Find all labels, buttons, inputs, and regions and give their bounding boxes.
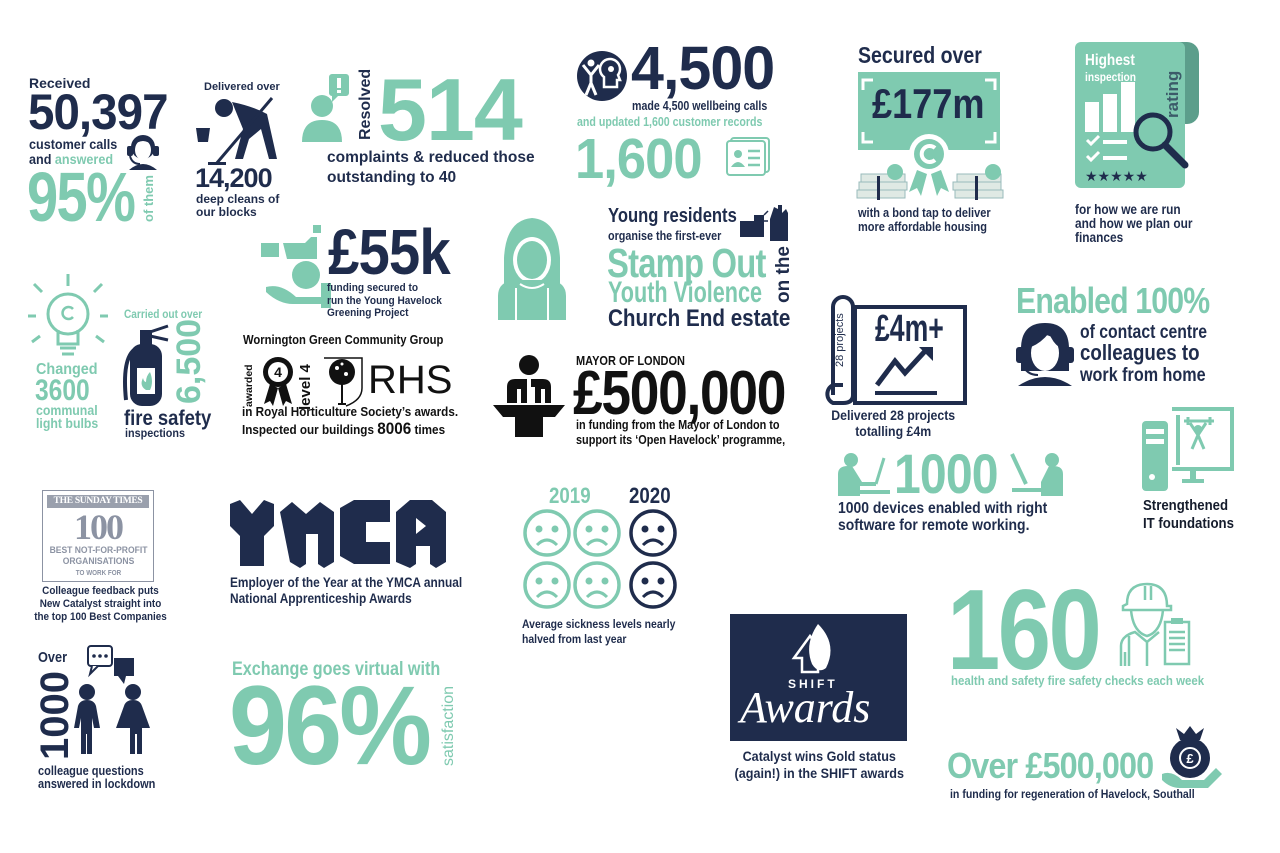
icon: cleaner [196, 97, 277, 165]
number: £500,000: £500,000 [573, 359, 785, 428]
icon: worker with clipboard [1119, 582, 1191, 666]
panel: mayor of london [493, 354, 785, 447]
text: over: Over [38, 649, 67, 666]
text: delivered projects: Delivered 28 projects [831, 407, 955, 423]
text: how we are run: for how we are run [1075, 202, 1181, 217]
heading: secured over: Secured over [858, 42, 982, 68]
icon: fire extinguisher [123, 324, 168, 406]
text: communal bulbs: communal [36, 402, 98, 418]
text: funding from mayor: in funding from the Mayor of London to [576, 418, 780, 432]
text: colleague feedback: the top 100 Best Companies [34, 611, 167, 623]
panel: YMCA [228, 496, 473, 608]
logo: YMCA [230, 498, 466, 568]
text: of them: of them [141, 175, 156, 222]
text: work from home: work from home [1080, 365, 1206, 386]
panel: regeneration funding [945, 722, 1230, 804]
text: colleagues to: colleagues to [1080, 340, 1200, 365]
text: received: Received [29, 75, 90, 91]
text: how we are run: and how we plan our [1075, 216, 1192, 231]
text: havelock southall: in funding for regeneration of Havelock, Southall [950, 787, 1195, 801]
text: devices enabled: 1000 devices enabled with right [838, 500, 1047, 517]
logo: sunday times 100: TO WORK FOR [76, 570, 121, 577]
text: RHS: RHS [368, 358, 452, 402]
chart: sad faces [520, 507, 685, 611]
text: customer calls [29, 136, 117, 167]
number: 96%: 96% [229, 663, 429, 788]
text: funding secured [327, 282, 442, 319]
icon: rating card: ★★★★★ [1085, 169, 1148, 185]
text: delivered over: Delivered over [204, 81, 280, 93]
text: communal bulbs [36, 402, 98, 431]
text: how we are run: finances [1075, 230, 1123, 245]
number: 6,500: 6,500 [170, 319, 208, 404]
icon: rating card [1075, 42, 1199, 188]
icon: computer with weightlifter [1142, 407, 1237, 492]
text: inspections: inspections [125, 426, 185, 440]
panel: inspection rating: inspection [1085, 70, 1136, 84]
panel: £55k [261, 216, 451, 319]
text: funding secured: run the Young Havelock [327, 294, 442, 306]
text: deep cleans: deep cleans of [196, 192, 279, 206]
icon: money bag in hand: £ [1186, 751, 1194, 766]
text: wornington: Wornington Green Community Group [243, 333, 443, 347]
text: funding from mayor: support its ‘Open Havelock’ programme, [576, 433, 785, 447]
text: colleague questions: answered in lockdown [38, 777, 155, 791]
heading: youth violence: Youth Violence [608, 276, 762, 309]
text: level 4: level 4 [297, 364, 314, 410]
icon: scroll with chart [825, 295, 967, 405]
text: how we are run [1075, 202, 1192, 245]
logo: sunday times 100: BEST NOT-FOR-PROFIT [50, 545, 147, 556]
icon: fist and hand [740, 205, 788, 241]
panel: 160 checks [945, 580, 1190, 690]
number: 14,200: 14,200 [195, 163, 272, 193]
logo: SHIFT awards: SHIFT [788, 677, 838, 691]
panel: sickness levels [520, 483, 685, 645]
number: 50,397: 50,397 [28, 84, 168, 140]
panel: wellbeing calls [575, 34, 774, 191]
text: deep cleans: our blocks [196, 205, 257, 219]
icon: person at laptop left [836, 452, 891, 496]
text: mayor of london: MAYOR OF LONDON [576, 354, 685, 368]
logo: SHIFT awards [730, 614, 907, 741]
icon: hooded youth [498, 218, 566, 320]
panel: inspection rating [1075, 42, 1199, 245]
text: colleague questions [38, 765, 155, 791]
text: changed: Changed [36, 361, 98, 378]
panel: sunday times [33, 488, 168, 623]
text: bond tap: with a bond tap to deliver [858, 206, 991, 220]
heading: stamp out: Stamp Out [607, 240, 766, 286]
logo: sunday times 100: ORGANISATIONS [63, 556, 134, 567]
heading: enabled 100%: Enabled 100% [1016, 280, 1209, 321]
logo: sunday times 100: THE SUNDAY TIMES [54, 496, 142, 506]
text: colleague feedback [33, 585, 168, 624]
text: society awards: in Royal Horticulture Society’s awards. [242, 404, 458, 419]
text: catalyst wins gold: Catalyst wins Gold status [743, 748, 896, 764]
number: £4m+: £4m+ [875, 308, 944, 350]
text: wellbeing calls: made 4,500 wellbeing calls [632, 99, 767, 113]
text: resolved: Resolved [357, 69, 374, 140]
panel: SHIFT awards [727, 612, 912, 785]
icon: light bulb [28, 274, 108, 356]
text: average sickness: halved from last year [522, 632, 626, 646]
icon: person with alert [302, 74, 349, 142]
panel: 28 projects [825, 295, 967, 439]
logo: sunday times 100: 100 [74, 507, 122, 547]
logo: SHIFT awards: Awards [740, 683, 870, 732]
text: funding secured: Greening Project [327, 307, 409, 319]
panel: deep cleans [195, 81, 280, 219]
logo: sunday times 100 [42, 490, 154, 582]
icon: podium speaker [493, 355, 565, 437]
text: employer of the year: National Apprenticeship Awards [230, 591, 412, 606]
text: satisfaction: satisfaction [440, 686, 457, 766]
text: bond tap [858, 206, 991, 234]
text: strengthened IT [1143, 497, 1234, 533]
panel: light bulbs [28, 274, 108, 431]
icon: hand with money bag [261, 225, 331, 308]
number: £177m: £177m [872, 80, 984, 127]
text: average sickness: Average sickness levels nearly [522, 617, 675, 631]
text: inspected buildings: Inspected our buildings 8006 times [242, 419, 445, 438]
panel: 1000 devices [836, 448, 1071, 533]
text: devices enabled: software for remote working. [838, 517, 1029, 534]
icon: headset operator [127, 135, 159, 170]
icon: level 4 rosette [263, 357, 293, 406]
heading: highest inspection: Highest [1085, 52, 1135, 69]
text: organise: organise the first-ever [608, 228, 721, 243]
icon: headset agent [1014, 321, 1076, 386]
text: average sickness [522, 617, 675, 647]
panel: contact centre [1016, 280, 1210, 386]
text: rating: rating [1163, 71, 1182, 118]
text: deep cleans [196, 192, 280, 219]
text: customer records: and updated 1,600 customer records [577, 115, 762, 129]
text: fire safety: fire safety [124, 407, 211, 430]
text: devices enabled [838, 500, 1047, 534]
text: customer calls: customer calls [29, 136, 117, 152]
panel: customer calls [27, 75, 168, 236]
number: 1000: 1000 [894, 442, 998, 505]
text: funding secured: funding secured to [327, 282, 418, 294]
panel: stamp out youth violence [498, 205, 794, 332]
icon: RHS tree shield [324, 357, 363, 407]
text: delivered projects [831, 407, 955, 439]
number: 1,600: 1,600 [575, 127, 702, 191]
number: 95%: 95% [27, 158, 134, 236]
text: employer of the year [230, 575, 462, 607]
text: 2020: 2020 [629, 483, 671, 508]
text: bond tap: more affordable housing [858, 220, 987, 234]
text: 28 projects: 28 projects [834, 313, 846, 367]
text: colleague questions: colleague questions [38, 764, 144, 778]
icon: wellbeing circle [577, 51, 627, 101]
number: 4,500: 4,500 [631, 34, 774, 102]
text: employer of the year: Employer of the Year at the YMCA annual [230, 575, 462, 590]
number: 1000 vertical: 1000 [33, 671, 77, 760]
text: of contact centre: of contact centre [1080, 322, 1207, 343]
icon: level 4 rosette: 4 [274, 364, 282, 380]
text: strengthened IT: Strengthened [1143, 497, 1228, 514]
text: delivered projects: totalling £4m [855, 423, 931, 439]
icon: money bag in hand [1160, 724, 1222, 788]
panel: RHS awards [242, 333, 458, 438]
panel: exchange 96% [229, 660, 464, 772]
panel: fire safety [123, 309, 212, 440]
text: health and safety: health and safety fire safety checks each week [951, 673, 1204, 688]
number: 514: 514 [378, 60, 522, 159]
text: customer calls: and answered [29, 151, 113, 167]
panel: colleague questions [34, 643, 159, 793]
text: awarded: awarded [243, 364, 255, 407]
text: catalyst wins gold [727, 748, 912, 782]
text: complaints: outstanding to 40 [327, 169, 456, 186]
number: over £500,000: Over £500,000 [947, 745, 1153, 786]
text: catalyst wins gold: (again!) in the SHIFT awards [735, 765, 904, 781]
icon: person at laptop right [1010, 452, 1065, 496]
text: complaints: complaints & reduced those [327, 149, 535, 166]
panel: bond £177m [856, 42, 1004, 234]
text: colleague feedback: Colleague feedback puts [42, 585, 159, 597]
number: 160: 160 [947, 567, 1099, 694]
text: carried out over: Carried out over [124, 309, 202, 321]
text: young residents: Young residents [608, 205, 737, 227]
text: complaints [327, 149, 535, 186]
icon: ID card [726, 137, 770, 176]
heading: exchange goes virtual: Exchange goes virtual with [232, 659, 440, 680]
number: £55k: £55k [328, 216, 450, 288]
panel: complaints [302, 60, 535, 186]
text: strengthened IT: IT foundations [1143, 515, 1234, 532]
text: funding from mayor [576, 418, 785, 447]
icon: two people with speech bubbles [70, 644, 158, 756]
text: communal bulbs: light bulbs [36, 415, 98, 431]
icon: banknote with rosette [856, 72, 1004, 200]
number: 3600: 3600 [35, 374, 90, 407]
text: 2019: 2019 [549, 483, 591, 508]
text: on the: on the [773, 246, 794, 303]
icon: leaf arrow [790, 622, 840, 674]
text: church end: Church End estate [608, 305, 790, 332]
panel: IT foundations [1138, 405, 1243, 533]
text: colleague feedback: New Catalyst straight into [40, 598, 161, 610]
